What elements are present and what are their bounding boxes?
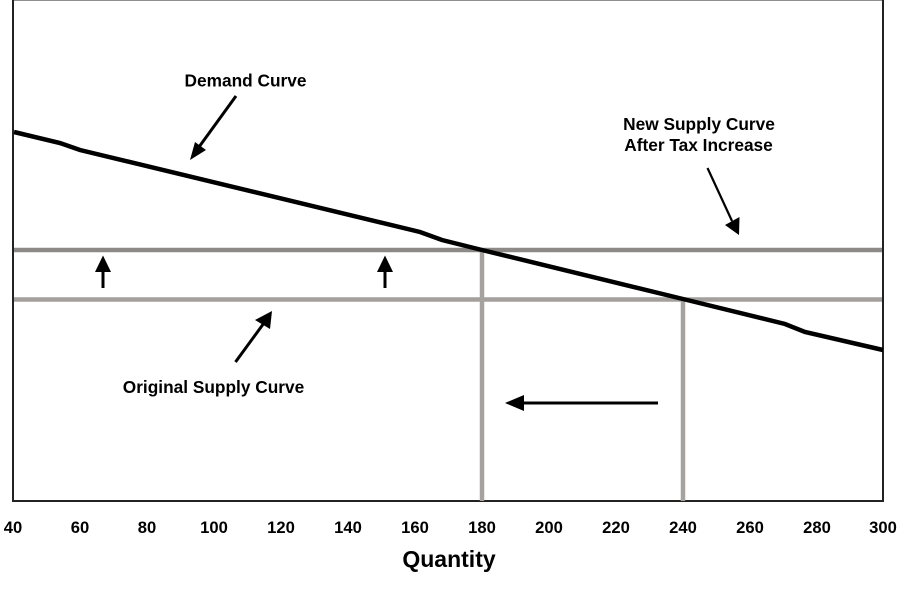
x axis tick labels: 300 bbox=[869, 518, 897, 537]
x axis tick labels: 220 bbox=[602, 518, 630, 537]
arrow to demand curve bbox=[190, 96, 236, 160]
x axis tick labels: 60 bbox=[71, 518, 89, 537]
new supply curve label: New Supply Curve bbox=[623, 114, 775, 134]
x axis tick labels: 160 bbox=[401, 518, 429, 537]
vertical line at quantity 240 bbox=[681, 299, 685, 501]
x axis tick labels: 200 bbox=[535, 518, 563, 537]
upward shift arrow left bbox=[95, 256, 111, 288]
x axis tick labels: 280 bbox=[803, 518, 831, 537]
x axis tick labels: 240 bbox=[669, 518, 697, 537]
x axis title: Quantity bbox=[402, 546, 496, 572]
x axis tick labels bbox=[4, 518, 897, 537]
original supply curve label: Original Supply Curve bbox=[123, 377, 305, 397]
demand curve label: Demand Curve bbox=[185, 70, 307, 90]
x axis tick labels: 40 bbox=[4, 518, 22, 537]
upward shift arrow right bbox=[377, 256, 393, 288]
x axis tick labels: 260 bbox=[736, 518, 764, 537]
x axis tick labels: 120 bbox=[267, 518, 295, 537]
x axis tick labels: 100 bbox=[200, 518, 228, 537]
arrow to new supply curve bbox=[708, 168, 740, 235]
new supply curve label: After Tax Increase bbox=[624, 135, 773, 155]
x axis tick labels: 80 bbox=[138, 518, 156, 537]
original supply curve line bbox=[14, 297, 882, 302]
demand curve line bbox=[14, 132, 883, 350]
leftward quantity shift arrow bbox=[505, 395, 658, 411]
new supply curve line bbox=[14, 248, 882, 252]
chart frame bbox=[13, 0, 883, 501]
new supply curve label bbox=[623, 114, 775, 155]
x axis tick labels: 140 bbox=[334, 518, 362, 537]
arrow to original supply curve bbox=[236, 311, 272, 362]
vertical line at quantity 180 bbox=[480, 250, 484, 501]
x axis tick labels: 180 bbox=[468, 518, 496, 537]
